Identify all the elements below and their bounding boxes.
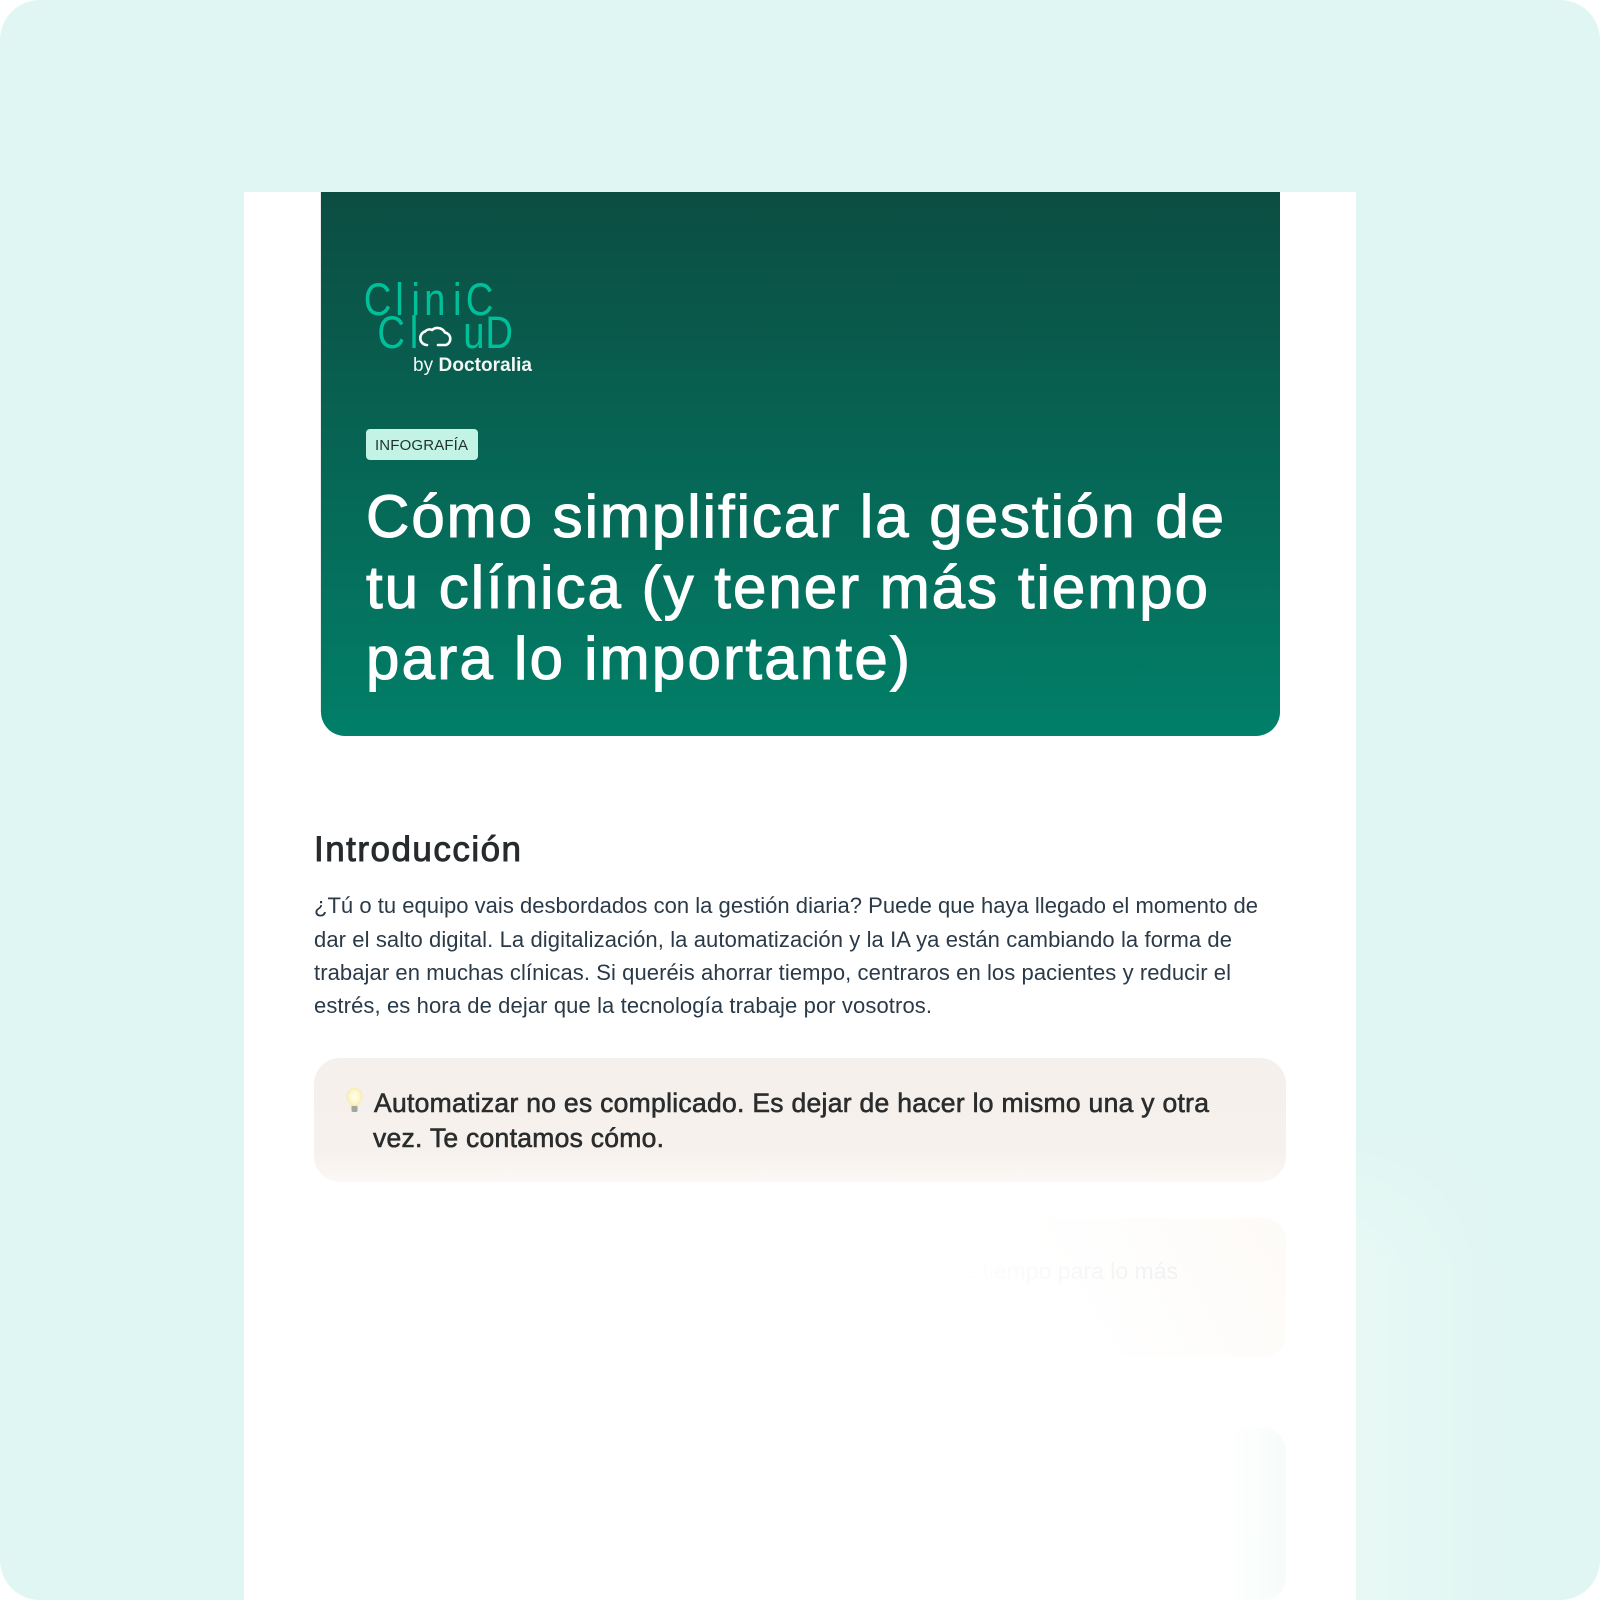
panel: hero header	[320, 192, 1280, 736]
callout: automatizar: vez. Te contamos cómo.	[373, 1123, 664, 1153]
text block: introduction paragraph	[314, 893, 1258, 1018]
panel: faded third card	[900, 1428, 1286, 1600]
title	[366, 483, 1224, 692]
logo: ClinicCloud by Doctoralia: Cl uD	[377, 307, 513, 358]
title: tu clínica (y tener más tiempo	[366, 554, 1208, 621]
title: para lo importante)	[366, 625, 910, 692]
badge: infografía	[366, 429, 478, 460]
panel: faded second callout: mente tiempo para lo más	[912, 1258, 1178, 1284]
logo: ClinicCloud by Doctoralia	[364, 274, 532, 376]
text block: introduction paragraph: estrés, es hora de dejar que la tecnología trabaje por vosotros.	[314, 993, 932, 1018]
text block: introduction paragraph: ¿Tú o tu equipo vais desbordados con la gestión diaria? Puede que haya llegado el momento de	[314, 893, 1258, 918]
logo: ClinicCloud by Doctoralia: by Doctoralia	[413, 355, 532, 376]
heading: Introducción: Introducción	[314, 830, 521, 869]
side fade	[1356, 1120, 1506, 1600]
text block: introduction paragraph: dar el salto digital. La digitalización, la automatización y la IA ya están cambiando la forma de	[314, 927, 1232, 952]
badge: infografía: INFOGRAFÍA	[375, 437, 468, 454]
icon: light bulb	[346, 1088, 362, 1112]
logo: ClinicCloud by Doctoralia: CliniC	[364, 274, 493, 325]
title: Cómo simplificar la gestión de	[366, 483, 1224, 550]
text block: introduction paragraph: trabajar en muchas clínicas. Si queréis ahorrar tiempo, centraros en los pacientes y reducir el	[314, 960, 1231, 985]
white document sheet	[244, 192, 1356, 1600]
callout: automatizar	[314, 1058, 1286, 1182]
callout: automatizar: Automatizar no es complicado. Es dejar de hacer lo mismo una y otra	[374, 1088, 1209, 1118]
panel: faded second callout	[700, 1218, 1286, 1357]
